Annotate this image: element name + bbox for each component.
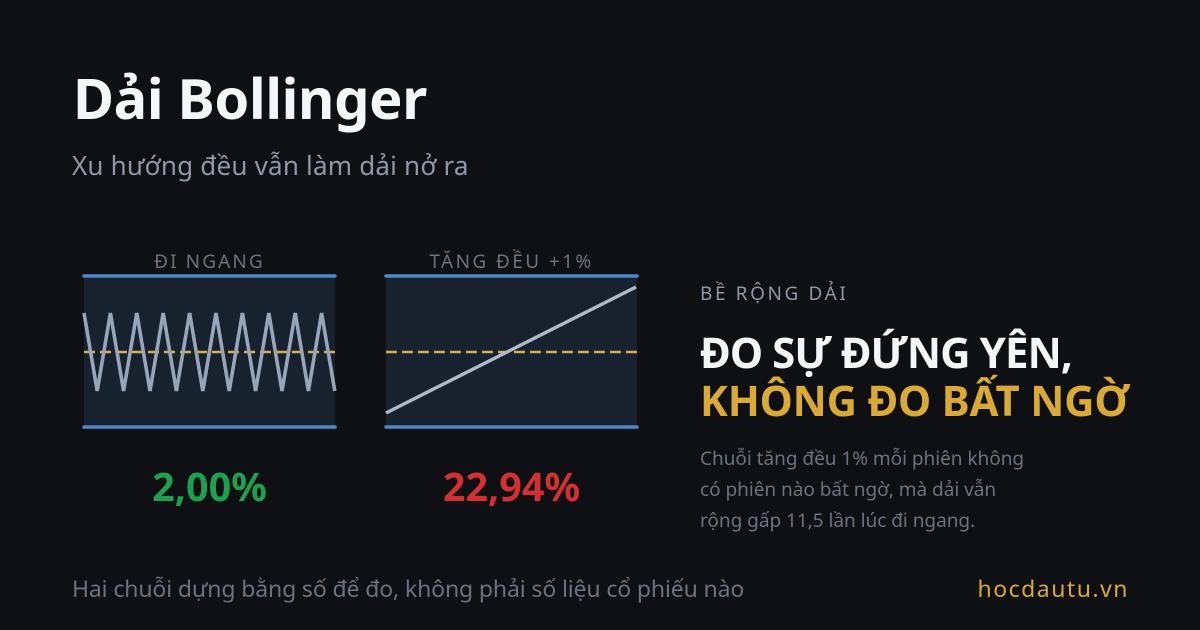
description: Chuỗi tăng đều 1% mỗi phiên không bbox=[700, 445, 1024, 471]
label: rising: TĂNG ĐỀU +1% bbox=[429, 248, 594, 274]
footer note: Hai chuỗi dựng bằng số để đo, không phải số liệu cổ phiếu nào bbox=[72, 572, 744, 604]
description: có phiên nào bất ngờ, mà dải vẫn bbox=[700, 476, 996, 502]
title: Dải Bollinger bbox=[73, 60, 427, 136]
description bbox=[700, 445, 1024, 533]
headline: ĐO SỰ ĐỨNG YÊN, bbox=[700, 324, 1072, 381]
headline: KHÔNG ĐO BẤT NGỜ bbox=[700, 372, 1129, 429]
panel: sideways band bbox=[84, 276, 335, 427]
headline bbox=[700, 324, 1130, 429]
subtitle: Xu hướng đều vẫn làm dải nở ra bbox=[72, 147, 469, 183]
brand: hocdautu.vn bbox=[977, 572, 1129, 604]
value: rising: 22,94% bbox=[443, 459, 580, 513]
kicker: BỀ RỘNG DẢI bbox=[700, 280, 848, 306]
label: sideways: ĐI NGANG bbox=[154, 248, 265, 274]
value: sideways: 2,00% bbox=[152, 459, 267, 513]
panel: rising band bbox=[386, 276, 637, 427]
description: rộng gấp 11,5 lần lúc đi ngang. bbox=[700, 507, 975, 533]
